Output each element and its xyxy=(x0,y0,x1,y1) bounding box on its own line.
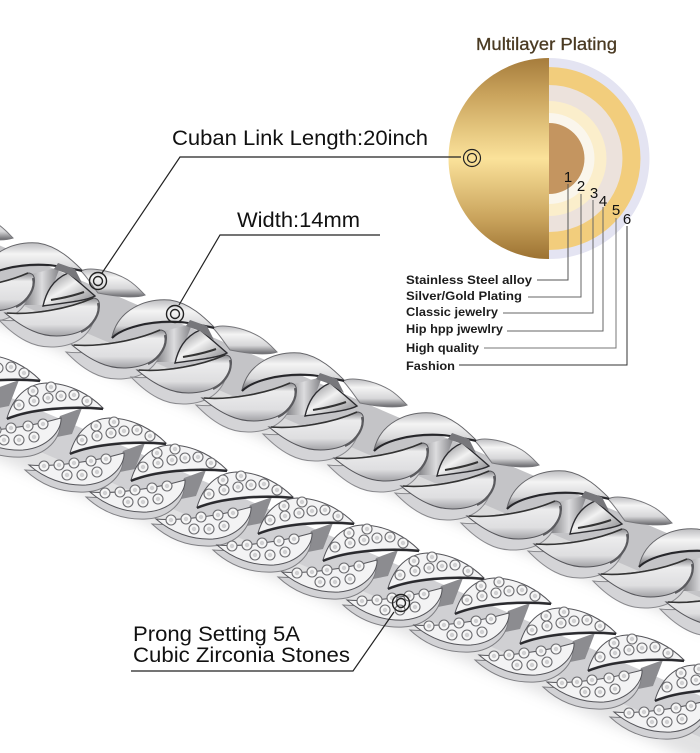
layer numbers: 1 xyxy=(564,169,572,186)
layer numbers xyxy=(564,169,631,228)
callout: prong setting stones: Prong Setting 5A xyxy=(133,622,301,646)
layer labels: Hip hpp jwewlry xyxy=(406,322,503,336)
layer labels: High quality xyxy=(406,341,479,355)
layer labels: Fashion xyxy=(406,359,455,373)
chain: iced zirconia link xyxy=(0,354,700,745)
layer numbers: 2 xyxy=(577,178,585,195)
layer numbers: 3 xyxy=(590,185,598,202)
callout: prong setting stones: Cubic Zirconia Stones xyxy=(133,643,350,667)
callout: cuban link length xyxy=(90,126,480,290)
layer numbers: 6 xyxy=(623,211,631,228)
heading: multilayer plating: Multilayer Plating xyxy=(476,34,617,54)
layer labels: Stainless Steel alloy xyxy=(406,273,532,287)
layer leader lines xyxy=(459,184,627,365)
layer numbers: 4 xyxy=(599,193,607,210)
diagram: plating cross-section xyxy=(448,58,650,259)
chain: plain cuban link xyxy=(0,186,700,650)
callout: width xyxy=(166,209,380,322)
callout: cuban link length: Cuban Link Length:20inch xyxy=(172,126,428,150)
layer labels: Classic jewelry xyxy=(406,305,498,319)
layer numbers: 5 xyxy=(612,202,620,219)
gold half xyxy=(448,58,549,259)
callout: width: Width:14mm xyxy=(237,209,360,232)
plating layers half xyxy=(549,58,650,259)
layer labels: Silver/Gold Plating xyxy=(406,289,522,303)
layer labels xyxy=(406,273,532,373)
callout: prong setting stones xyxy=(131,594,410,671)
